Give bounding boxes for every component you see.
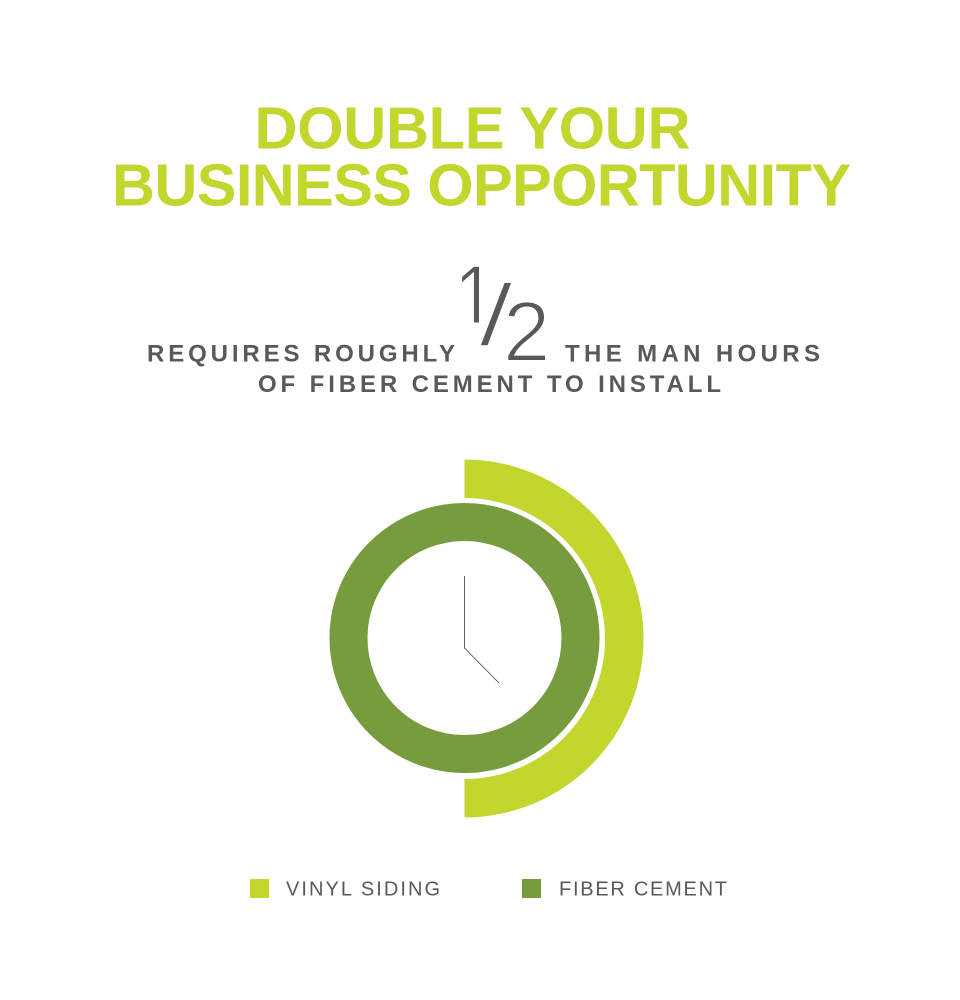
legend swatch fiber [522,879,541,898]
subtitle text: REQUIRES ROUGHLY [147,340,455,368]
fraction one half: / [479,267,514,364]
subtitle text: THE MAN HOURS [565,340,820,368]
vinyl siding half ring [464,460,643,818]
title: DOUBLE YOUR [254,94,690,161]
subtitle text: OF FIBER CEMENT TO INSTALL [258,371,721,398]
title [112,94,851,218]
fiber cement ring [348,522,580,754]
clock hands [464,576,499,683]
legend label fiber: FIBER CEMENT [559,878,727,900]
title: BUSINESS OPPORTUNITY [112,151,851,218]
subtitle text [147,340,820,398]
legend label vinyl: VINYL SIDING [286,878,440,900]
legend [250,878,727,900]
fraction one half: 2 [503,285,550,380]
legend swatch vinyl [250,879,269,898]
fraction one half [462,266,545,360]
fraction one half: 1 [454,246,496,352]
